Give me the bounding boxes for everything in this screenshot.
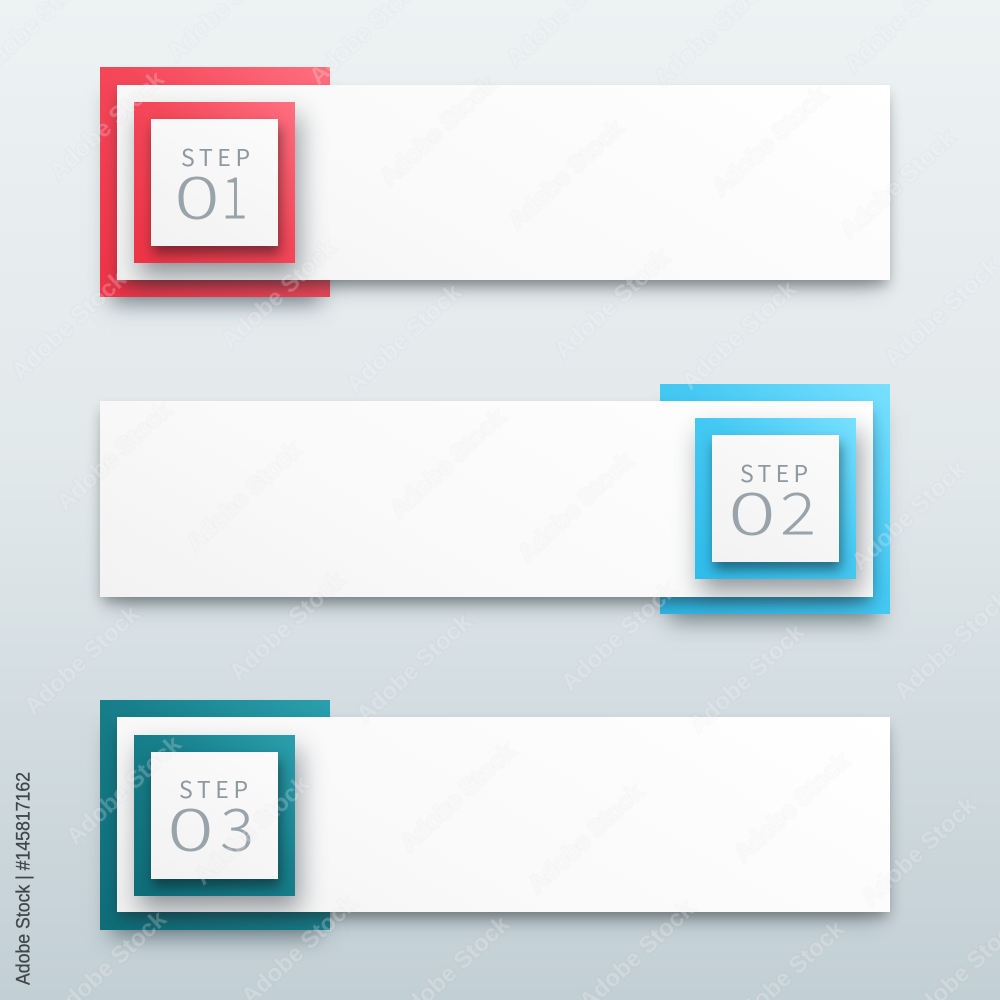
step label: STEP xyxy=(179,771,248,805)
watermark text pattern: Adobe Stock xyxy=(729,747,855,867)
panel: step 01 banner xyxy=(95,67,898,320)
watermark text pattern: Adobe Stock xyxy=(19,600,145,720)
red outer square xyxy=(100,67,330,297)
watermark text pattern: Adobe Stock xyxy=(856,791,982,911)
step number 01 xyxy=(174,152,248,236)
blue outer square xyxy=(660,384,890,614)
watermark text pattern: Adobe Stock xyxy=(385,403,511,523)
panel: step 02 banner xyxy=(92,384,894,636)
watermark text pattern: Adobe Stock xyxy=(375,71,501,191)
watermark text pattern: Adobe Stock xyxy=(6,265,132,385)
watermark text pattern: Adobe Stock xyxy=(513,447,639,567)
watermark text pattern: Adobe Stock xyxy=(44,65,170,185)
step label: STEP xyxy=(181,139,250,173)
badge: step 02 xyxy=(712,435,839,562)
watermark text pattern: Adobe Stock xyxy=(503,114,629,234)
watermark text pattern: Adobe Stock xyxy=(395,737,521,857)
watermark text pattern: Adobe Stock xyxy=(61,730,187,850)
badge: step 01 xyxy=(151,119,278,246)
step label: STEP xyxy=(740,455,808,489)
watermark text pattern: Adobe Stock xyxy=(846,455,972,575)
watermark text pattern: Adobe Stock xyxy=(216,234,342,354)
watermark text pattern: Adobe Stock xyxy=(224,566,350,686)
blue inner square xyxy=(695,418,856,579)
watermark text pattern: Adobe Stock xyxy=(549,244,675,364)
teal inner square xyxy=(134,735,295,896)
red inner square xyxy=(134,102,295,263)
step number 02: 0 xyxy=(728,468,776,552)
step number 01: 0 xyxy=(174,152,220,236)
step number 03: 0 xyxy=(167,784,214,868)
watermark text pattern: Adobe Stock xyxy=(707,81,833,201)
step number 01: 1 xyxy=(221,152,248,236)
white banner 02 xyxy=(100,401,873,597)
step number 03 xyxy=(167,784,254,868)
step number 03: 3 xyxy=(220,784,254,868)
panel: step 03 banner xyxy=(96,700,898,952)
watermark text pattern: Adobe Stock xyxy=(341,278,467,398)
watermark text pattern: Adobe Stock xyxy=(523,778,649,898)
watermark text pattern: Adobe Stock xyxy=(181,436,307,556)
watermark text pattern: Adobe Stock xyxy=(676,275,802,395)
watermark text pattern: Adobe Stock xyxy=(189,770,315,890)
white banner 03 xyxy=(117,717,890,912)
watermark text pattern: Adobe Stock xyxy=(684,618,810,738)
watermark text pattern: Adobe Stock xyxy=(556,576,682,696)
step number 02: 2 xyxy=(780,468,816,552)
step number 02 xyxy=(728,468,816,552)
teal outer square xyxy=(100,700,330,930)
white banner 01 xyxy=(117,85,890,280)
watermark text pattern: Adobe Stock xyxy=(835,124,961,244)
watermark text pattern: Adobe Stock xyxy=(51,396,177,516)
badge: step 03 xyxy=(151,752,278,879)
watermark text pattern: Adobe Stock xyxy=(351,608,477,728)
